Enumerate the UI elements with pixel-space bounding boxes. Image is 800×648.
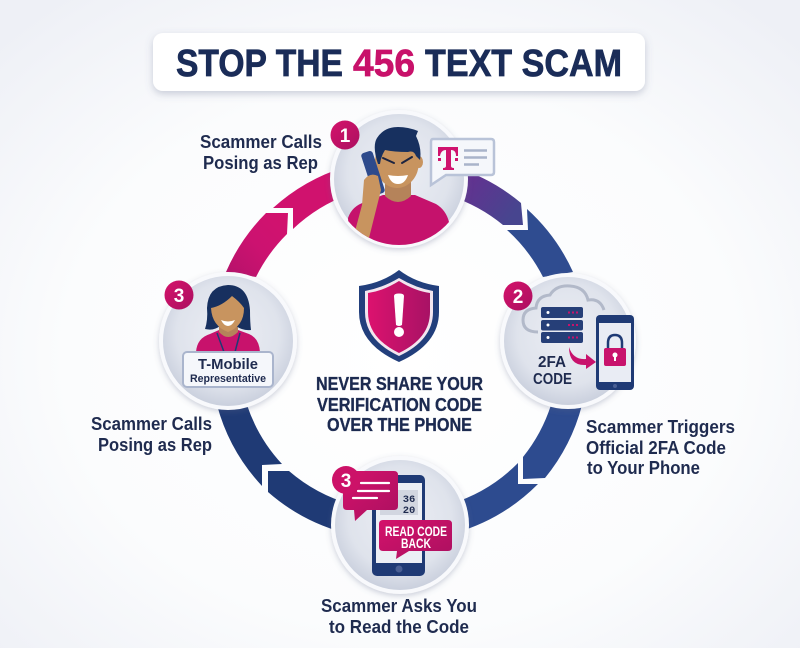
arrow: upper left upper piece [273, 167, 350, 229]
neck [219, 326, 238, 337]
face [211, 296, 244, 332]
step 3: read code illustration: BACK [401, 535, 431, 551]
label: step 1: Posing as Rep [203, 153, 318, 173]
phone [372, 475, 425, 576]
label: step 2: to Your Phone [587, 458, 700, 478]
badge 2: 2 [513, 287, 523, 308]
arrow: upper left lower piece [226, 213, 288, 277]
center warning text: VERIFICATION CODE [317, 394, 482, 415]
title text: STOP THE [176, 43, 343, 85]
arrow: lower right lower piece [450, 463, 538, 533]
label: step 2 [586, 417, 735, 478]
arrow: upper right purple piece [450, 167, 523, 225]
2FA code text: CODE [533, 371, 572, 388]
text lines [464, 150, 487, 164]
smile [221, 320, 235, 326]
arrow: lower left upper piece [217, 405, 282, 486]
step 4: representative illustration [161, 274, 295, 408]
step 1: scammer illustration [332, 112, 466, 250]
neck [385, 182, 411, 202]
center warning text: NEVER SHARE YOUR [316, 373, 483, 394]
arrow: lower right upper piece [523, 405, 582, 479]
badge 1: 1 [340, 126, 351, 147]
label: step 1: Scammer Calls [200, 132, 322, 152]
name card [183, 352, 273, 387]
shirt [348, 195, 450, 250]
hair [375, 127, 420, 164]
eyes [383, 157, 412, 163]
title card [153, 33, 645, 91]
message bubble [343, 471, 398, 521]
step 4: representative illustration: Representative [190, 373, 266, 385]
arrow: upper right blue piece [507, 209, 573, 277]
label: step 4: Scammer Calls [91, 414, 212, 434]
hair [205, 285, 251, 330]
phone [360, 150, 386, 196]
ring: cycle arrows [217, 167, 582, 533]
arm and hand [356, 174, 381, 238]
code box [380, 490, 418, 515]
badge 3 left [164, 280, 194, 310]
step 3: read code illustration: READ CODE [385, 523, 447, 539]
title [153, 33, 645, 91]
arrow: lower left lower piece [268, 471, 350, 533]
step 3: read code illustration [333, 458, 467, 592]
label: step 1 [200, 132, 322, 173]
lock [608, 335, 622, 349]
badge 1 [330, 120, 360, 150]
center warning text [316, 373, 483, 435]
title text [176, 43, 622, 85]
icon: warning shield [359, 270, 439, 362]
phone [596, 315, 634, 390]
label: step 4 [91, 414, 212, 455]
T logo [438, 147, 458, 170]
badge 2 [504, 282, 532, 310]
head [375, 150, 418, 188]
label: step 4: Posing as Rep [98, 435, 212, 455]
step 2: cloud and phone illustration [502, 275, 634, 407]
label: step 2: Scammer Triggers [586, 417, 735, 437]
servers [541, 307, 583, 343]
step 3: read code illustration: 20 [403, 505, 415, 517]
title text: TEXT SCAM [425, 43, 622, 85]
label: step 3: to Read the Code [329, 617, 469, 637]
title text: 456 [353, 43, 415, 85]
step 3: read code illustration: 36 [403, 494, 415, 506]
badge 3 bottom: 3 [341, 471, 351, 492]
label: step 2: Official 2FA Code [586, 438, 726, 458]
label: step 3: Scammer Asks You [321, 596, 477, 616]
2FA code text: 2FA [538, 354, 566, 371]
step 1: speech bubble with T logo [431, 139, 494, 185]
step 4: representative illustration: T-Mobile [198, 356, 258, 373]
body [196, 330, 260, 352]
center warning text: OVER THE PHONE [327, 414, 472, 435]
badge 3 bottom [332, 466, 360, 494]
2FA code text [533, 354, 572, 388]
badge 3 left: 3 [174, 286, 184, 307]
cloud [523, 286, 604, 332]
label: step 3 [321, 596, 477, 637]
lanyard [217, 333, 240, 352]
arrow [569, 347, 596, 369]
read code bubble [379, 520, 452, 559]
smile [388, 175, 408, 184]
